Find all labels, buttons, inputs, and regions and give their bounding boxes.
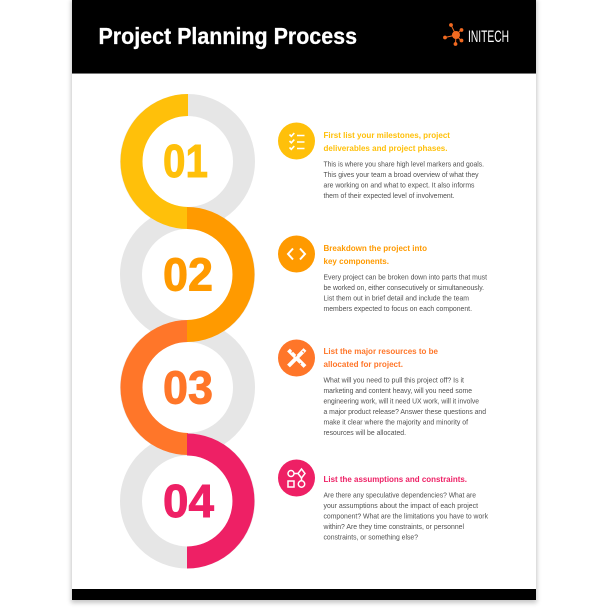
icon: flow shapes	[278, 460, 315, 496]
body text	[324, 160, 484, 200]
heading: List the assumptions and constraints.	[324, 474, 467, 484]
body text: them of their expected level of involvement.	[324, 191, 455, 200]
body text: your assumptions about the impact of each project	[324, 501, 478, 510]
number 02: 02	[163, 248, 213, 300]
page	[72, 0, 536, 600]
heading: key components.	[324, 256, 389, 266]
heading	[324, 130, 450, 153]
body text	[324, 272, 487, 313]
body text	[323, 490, 488, 542]
icon: network logo	[444, 24, 463, 45]
heading: First list your milestones, project	[324, 130, 450, 140]
number 01: 01	[163, 135, 208, 187]
icon: code brackets	[278, 236, 315, 272]
heading	[324, 346, 438, 369]
ring arc 3	[132, 331, 188, 444]
heading: deliverables and project phases.	[324, 143, 448, 153]
grey rings	[131, 105, 244, 558]
body text: make it clear where the majority and minority of	[324, 418, 468, 426]
body text: are working on and what to expect. It also informs	[324, 180, 475, 190]
body text: within? Are they time constraints, or personnel	[323, 522, 464, 531]
body text: marketing and content heavy, will you need some	[324, 386, 472, 395]
body text: Are there any speculative dependencies? What are	[324, 490, 476, 500]
body text: a major product release? Answer these questions and	[324, 407, 486, 416]
body text: Every project can be broken down into parts that must	[324, 272, 487, 282]
title: Project Planning Process	[98, 23, 357, 49]
heading	[324, 243, 427, 266]
body text: This is where you share high level markers and goals.	[324, 160, 484, 168]
footer bar	[72, 589, 536, 600]
body text: component? What are the limitations you have to work	[324, 512, 488, 520]
heading: Breakdown the project into	[324, 243, 427, 253]
ring arc 1	[132, 105, 188, 218]
icon: checklist	[278, 122, 315, 160]
ring arc 4	[187, 444, 243, 558]
body text: constraints, or something else?	[324, 532, 418, 542]
body text: members expected to focus on each component.	[324, 304, 472, 313]
body text: What will you need to pull this project off? Is it	[324, 376, 464, 384]
body text: resources will be allocated.	[324, 428, 406, 437]
body text	[324, 376, 486, 437]
body text: This gives your team a broad overview of what they	[324, 170, 479, 179]
step 4	[278, 460, 488, 542]
step 2	[278, 236, 487, 313]
heading: allocated for project.	[324, 359, 403, 369]
icon: crossed tools	[278, 340, 315, 376]
logo	[444, 24, 509, 46]
number 04: 04	[163, 475, 214, 527]
body text: List them out in brief detail and include the team	[324, 294, 469, 302]
header bar	[72, 0, 536, 74]
body text: engineering work, will it need UX work, will it involve	[324, 396, 479, 406]
heading: List the major resources to be	[324, 346, 438, 356]
ring arc 2	[187, 218, 243, 331]
number 03: 03	[163, 362, 213, 414]
body text: be worked on, either consecutively or simultaneously.	[324, 283, 484, 292]
logo wordmark: INITECH	[468, 28, 509, 46]
step 1	[278, 122, 484, 200]
step 3	[278, 340, 486, 437]
